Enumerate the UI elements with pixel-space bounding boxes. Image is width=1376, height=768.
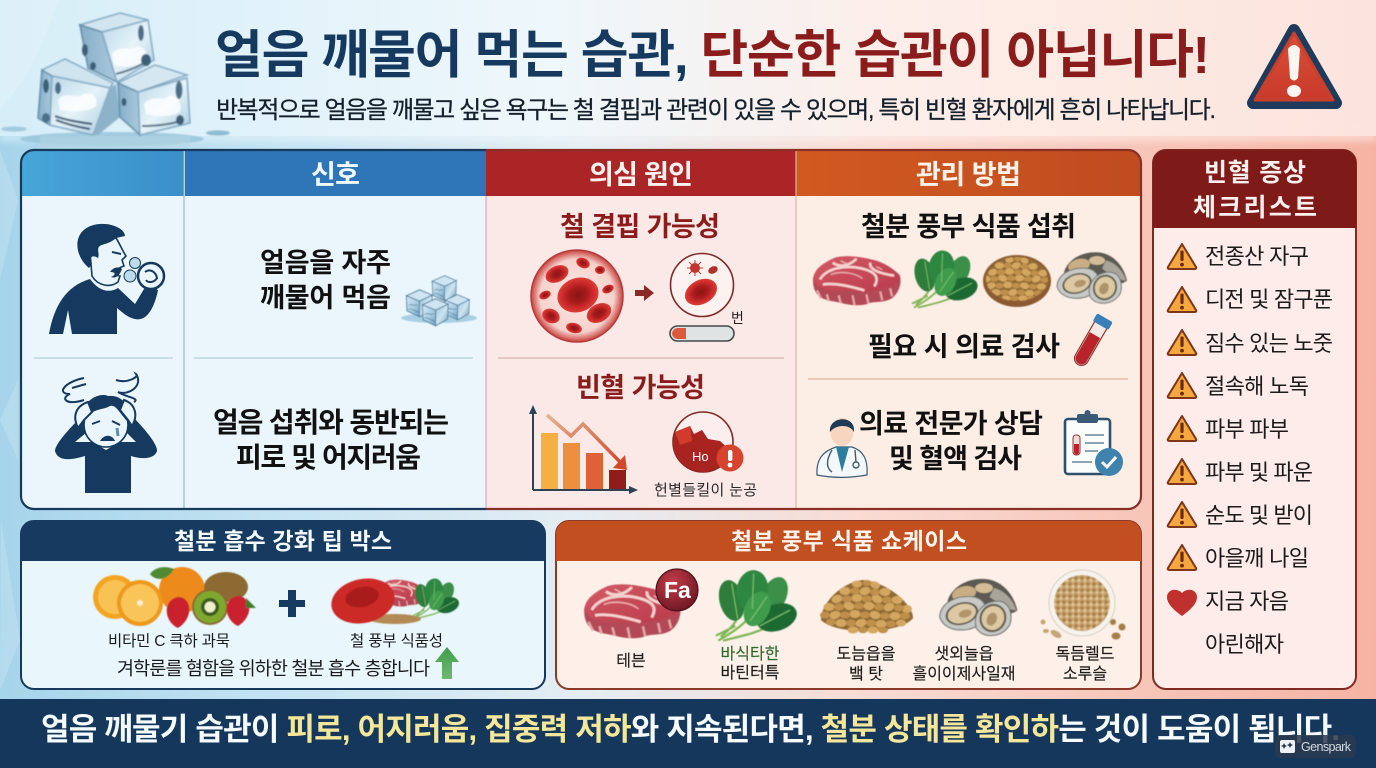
food labels: 샛외늘읍 xyxy=(935,645,993,663)
icon: healthy red blood cells xyxy=(531,250,623,342)
column headers xyxy=(21,150,1141,196)
tips sentence: 겨학룬를 혐함을 위하한 철분 흡수 층합니다 xyxy=(117,658,430,679)
checklist items xyxy=(1205,244,1333,657)
food: spinach xyxy=(715,568,800,641)
heading: signal: 신호 xyxy=(311,160,360,190)
food labels xyxy=(616,645,1114,683)
icon: ice cubes xyxy=(1,13,230,148)
subtitle: 반복적으로 얼음을 깨물고 싶은 욕구는 철 결핍과 관련이 있을 수 있으며, 특히 빈혈 환자에게 흔히 나타납니다. xyxy=(216,97,1216,124)
text: fatigue and dizziness xyxy=(213,407,449,473)
checklist items: 절속해 노독 xyxy=(1205,374,1309,399)
icon: blood test tube xyxy=(1070,313,1113,369)
checklist items: 짐수 있는 노줏 xyxy=(1205,331,1333,356)
icon: hemoglobin low: Ho xyxy=(692,449,709,464)
checklist items: 디전 및 잠구푼 xyxy=(1205,287,1333,312)
heading: suspected cause: 의심 원인 xyxy=(589,160,693,190)
footer banner xyxy=(0,699,1376,768)
icon: doctor xyxy=(817,418,867,477)
panel: iron absorption tips xyxy=(21,521,545,689)
checklist items: 아린해자 xyxy=(1205,632,1284,657)
panel outline right xyxy=(486,150,1141,509)
text: fatigue and dizziness: 얼음 섭취와 동반되는 xyxy=(213,407,449,438)
icon: iron badge xyxy=(656,569,698,611)
icon: clipboard check xyxy=(1065,410,1123,476)
icon: small ice cubes xyxy=(401,276,477,326)
tips title: 철분 흡수 강화 팁 박스 xyxy=(174,528,392,554)
food labels: 독듬렐드 xyxy=(1056,645,1114,663)
panel: main table xyxy=(21,150,1141,509)
checklist items: 파부 및 파운 xyxy=(1205,460,1313,485)
icon: iron foods row xyxy=(813,249,1127,308)
food labels: 흘이이제사일재 xyxy=(912,665,1016,683)
checklist title: 빈혈 증상 xyxy=(1204,159,1306,187)
food labels: 바틴터특 xyxy=(721,664,779,682)
chart: falling bars xyxy=(529,405,638,494)
food labels: 뱈 탓 xyxy=(849,665,883,683)
icon: warning triangle xyxy=(1253,30,1336,103)
text: chews ice: 얼음을 자주 xyxy=(260,248,391,278)
checklist items: 파부 파부 xyxy=(1205,417,1289,442)
panel: anemia checklist xyxy=(1153,150,1356,689)
text: medical test when needed: 필요 시 의료 검사 xyxy=(868,332,1060,362)
checklist items: 아을깨 나일 xyxy=(1205,546,1309,571)
icon: dizzy person xyxy=(55,374,157,493)
icon: deficient red blood cell xyxy=(670,254,734,316)
label: garbled tag: 번 xyxy=(731,310,744,326)
panel outline xyxy=(21,150,486,509)
checklist title: 체크리스트 xyxy=(1193,194,1317,222)
caption: anemia icon: 헌별들킬이 눈공 xyxy=(654,482,757,499)
ice cube left xyxy=(38,59,120,135)
text: specialist consult: 및 혈액 검사 xyxy=(889,444,1022,474)
ice cube top xyxy=(80,13,154,82)
text: fatigue and dizziness: 피로 및 어지러움 xyxy=(236,442,421,473)
checklist title xyxy=(1193,159,1317,222)
heading: iron rich foods: 철분 풍부 식품 섭취 xyxy=(861,212,1076,242)
icon: person chewing ice xyxy=(49,224,164,334)
heading: iron deficiency: 철 결핍 가능성 xyxy=(560,212,720,242)
icon: hemoglobin low xyxy=(673,412,744,472)
icon: iron badge: Fa xyxy=(664,577,691,603)
title: 얼음 깨물어 먹는 습관, 단순한 습관이 아닙니다! xyxy=(215,27,1210,85)
showcase title: 철분 풍부 식품 쇼케이스 xyxy=(731,528,967,554)
checklist items: 지금 자음 xyxy=(1205,589,1289,614)
text: chews ice: 깨물어 먹음 xyxy=(260,283,391,313)
watermark: Genspark: Genspark xyxy=(1301,740,1352,754)
heading: management: 관리 방법 xyxy=(916,160,1021,190)
ice cube right xyxy=(118,65,190,135)
food labels: 소루슬 xyxy=(1063,665,1107,683)
label: vitamin C fruit: 비타민 C 큭하 과묵 xyxy=(108,632,230,650)
watermark: Genspark xyxy=(1275,735,1356,758)
checklist items: 순도 및 받이 xyxy=(1205,503,1313,528)
food labels: 바식타한 xyxy=(721,645,780,663)
text: specialist consult: 의료 전문가 상담 xyxy=(859,409,1043,439)
icon: vitamin C fruits xyxy=(93,567,256,628)
panel: iron food showcase xyxy=(556,521,1141,689)
checklist items: 전종산 자구 xyxy=(1205,244,1309,269)
column bodies xyxy=(34,150,1141,509)
tips header xyxy=(21,521,545,561)
label: iron rich food: 철 풍부 식품성 xyxy=(350,632,443,650)
icon: red cell with iron foods xyxy=(327,573,461,629)
icon: plus xyxy=(279,590,305,617)
food: red meat xyxy=(584,584,680,638)
food: beans xyxy=(820,580,913,634)
food labels: 도늠읍을 xyxy=(837,645,895,663)
footer message: 얼음 깨물기 습관이 피로, 어지러움, 집중력 저하와 지속된다면, 철분 상태를 확인하는 것이 도움이 됩니다. xyxy=(41,712,1340,747)
icon: iron level bar xyxy=(670,326,734,341)
heading: anemia: 빈혈 가능성 xyxy=(576,373,705,403)
food labels: 테븐 xyxy=(616,652,646,670)
text: chews ice xyxy=(260,248,391,313)
arrow: absorption up xyxy=(435,647,459,679)
food: powder bowl xyxy=(1040,570,1126,640)
text: specialist consult xyxy=(859,409,1043,474)
icon: heart xyxy=(1167,590,1197,616)
arrow: to iron deficient cell xyxy=(635,285,654,301)
food: oysters xyxy=(940,579,1017,637)
showcase header xyxy=(556,521,1141,561)
checklist header xyxy=(1153,150,1356,228)
checklist warning icons xyxy=(1168,244,1196,570)
